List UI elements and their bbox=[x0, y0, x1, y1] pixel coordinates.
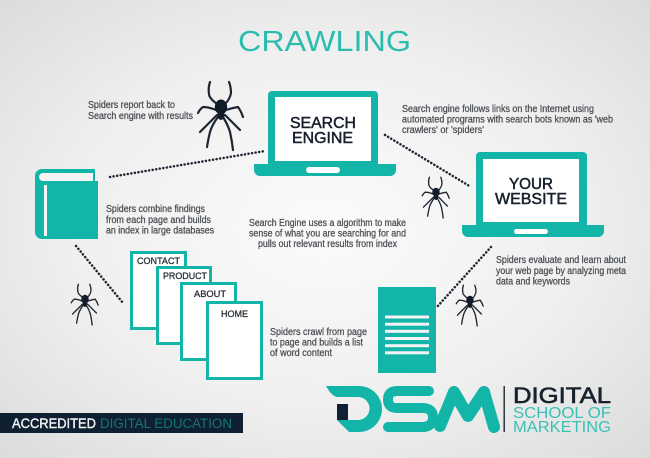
title: CRAWLING bbox=[238, 26, 411, 58]
text: search engine algorithm: pulls out relevant results from index bbox=[258, 239, 397, 250]
logo wordmark bbox=[513, 383, 611, 436]
page: home: HOME bbox=[221, 308, 248, 319]
icon: large spider bbox=[198, 82, 243, 150]
icon: stacked web pages bbox=[132, 252, 262, 378]
text: search engine algorithm bbox=[249, 218, 406, 250]
text: spiders evaluate: data and keywords bbox=[496, 276, 570, 288]
icon: spider near document bbox=[456, 285, 483, 326]
logo divider bbox=[504, 386, 505, 432]
text: spiders combine findings: Spiders combine findings bbox=[106, 204, 205, 215]
banner: accredited digital education bbox=[0, 413, 243, 433]
banner: accredited digital education: DIGITAL EDUCATION bbox=[100, 416, 232, 431]
dotted connector: book to pages bbox=[76, 246, 123, 303]
icon: document bbox=[378, 287, 436, 373]
text: spiders combine findings bbox=[106, 204, 214, 236]
text: search engine algorithm: sense of what you are searching for and bbox=[249, 228, 406, 240]
dotted connector: book to search engine bbox=[110, 151, 265, 177]
text: spiders evaluate bbox=[496, 255, 626, 288]
text: spiders report back: Search engine with results bbox=[88, 111, 193, 122]
icon: search engine laptop: SEARCH bbox=[290, 115, 356, 132]
text: spiders report back: Spiders report back to bbox=[88, 100, 175, 111]
icon: spider near pages bbox=[71, 284, 98, 325]
icon: book bbox=[35, 169, 98, 239]
text: spiders combine findings: an index in large databases bbox=[106, 226, 214, 236]
logo wordmark: MARKETING bbox=[513, 419, 611, 436]
icon: search engine laptop: ENGINE bbox=[292, 130, 353, 147]
dotted connector: search engine to website bbox=[385, 135, 471, 187]
text: search engine follows links: automated programs with search bots known as 'web bbox=[402, 114, 613, 126]
text: spiders crawl from page to page: Spiders crawl from page bbox=[270, 327, 367, 338]
text: spiders evaluate: Spiders evaluate and learn about bbox=[496, 255, 626, 266]
page: about: ABOUT bbox=[194, 288, 226, 299]
text: search engine follows links: crawlers' or 'spiders' bbox=[402, 125, 484, 136]
icon: search engine laptop bbox=[254, 91, 396, 176]
text: spiders report back bbox=[88, 100, 193, 122]
text: search engine follows links: Search engine follows links on the Internet using bbox=[402, 104, 594, 115]
dotted connector: website to document bbox=[437, 247, 491, 307]
text: spiders evaluate: your web page by analyzing meta bbox=[496, 266, 626, 277]
logo wordmark: SCHOOL OF bbox=[513, 405, 611, 422]
logo: DSM Digital School of Marketing bbox=[326, 383, 611, 436]
logo mark: D bbox=[326, 386, 382, 432]
text: spiders crawl from page to page: of word content bbox=[270, 348, 332, 359]
icon: your website laptop bbox=[462, 152, 604, 237]
logo mark: S bbox=[388, 391, 433, 427]
text: spiders crawl from page to page bbox=[270, 327, 367, 359]
page: product: PRODUCT bbox=[163, 270, 207, 281]
page: contact: CONTACT bbox=[137, 255, 180, 266]
banner: accredited digital education: ACCREDITED bbox=[12, 416, 96, 431]
icon: spider near website bbox=[422, 177, 449, 218]
text: spiders crawl from page to page: to page and builds a list bbox=[270, 338, 363, 348]
icon: your website laptop: YOUR bbox=[509, 176, 553, 193]
logo wordmark: DIGITAL bbox=[513, 383, 611, 408]
text: search engine follows links bbox=[402, 104, 613, 136]
icon: your website laptop: WEBSITE bbox=[495, 191, 567, 208]
text: search engine algorithm: Search Engine uses a algorithm to make bbox=[249, 218, 406, 229]
logo mark: M bbox=[440, 392, 494, 427]
text: spiders combine findings: from each page and builds bbox=[106, 215, 211, 226]
